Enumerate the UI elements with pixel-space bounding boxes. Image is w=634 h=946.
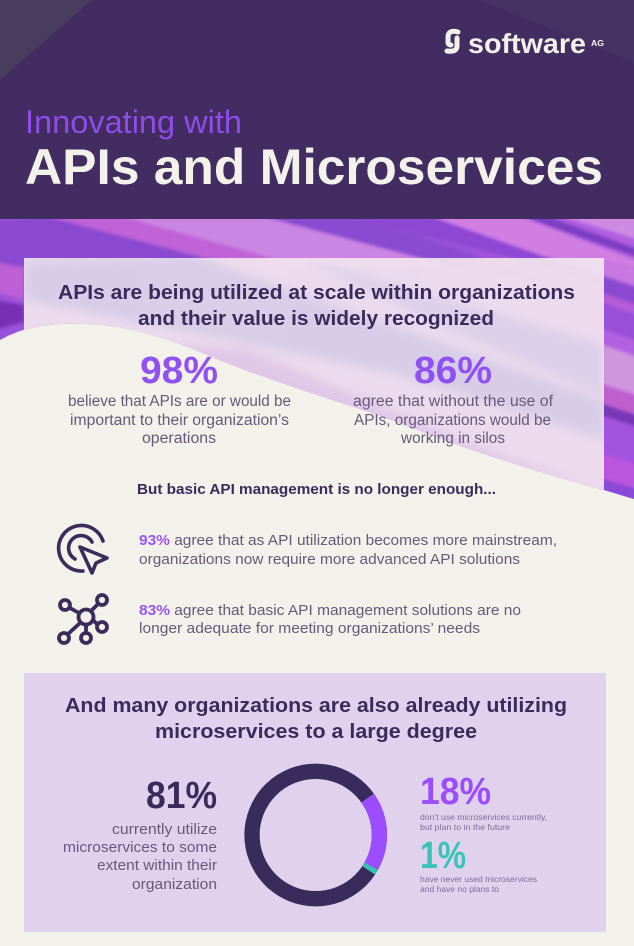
heading: APIs at scale: APIs are being utilized at scale within organizations [58,282,575,304]
stat: 18% [420,771,547,832]
stat text: 83% [139,602,521,637]
heading: microservices [65,695,567,743]
stat: 1%: have never used microservices [420,874,537,884]
stat: 1% [420,835,537,894]
stat: 86% [353,350,554,447]
stat text: 83%: longer adequate for meeting organizations’ needs [139,620,480,637]
stat: 1%: and have no plans to [420,884,499,894]
panel: translucent API panel background [24,258,604,498]
heading: microservices: microservices to a large degree [155,721,477,743]
icon: network nodes [59,595,107,643]
stat: 98%: 98% [140,350,218,392]
header band [0,0,634,219]
title: Innovating with [25,104,242,140]
subheading: basic API management: But basic API management is no longer enough... [137,482,496,498]
heading: APIs at scale: and their value is widely recognized [138,308,494,330]
title: APIs and Microservices [25,139,603,195]
stat: 98%: important to their organization’s [70,412,289,429]
stat text: 83%: 83% agree that basic API management solutions are no [139,602,521,619]
stat: 18%: don’t use microservices currently, [420,812,547,822]
stat: 81%: 81% [146,775,217,817]
stat: 81% [63,775,217,893]
logo: Software AG: software [468,28,586,59]
stat: 81%: microservices to some [63,840,217,856]
heading: microservices: And many organizations are also already utilizing [65,695,567,717]
stat: 98%: operations [142,430,216,447]
stat text: 93%: organizations now require more advanced API solutions [139,551,520,568]
stat text: 93% [139,532,557,568]
stat text: 93%: 93% agree that as API utilization becomes more mainstream, [139,532,557,549]
stat: 86%: 86% [414,350,492,392]
stat: 98% [68,350,291,447]
purple wave background [0,216,634,510]
stat: 1%: 1% [420,835,466,877]
donut chart [227,746,404,924]
stat: 81%: extent within their [97,858,217,874]
icon: target cursor [59,525,107,573]
stat: 18%: 18% [420,771,491,813]
panel: microservices [24,673,606,932]
stat: 86%: APIs, organizations would be [354,412,551,429]
stat: 86%: working in silos [400,430,505,447]
title [25,104,603,195]
logo: Software AG: AG [591,39,604,48]
stat: 86%: agree that without the use of [353,393,554,410]
stat: 18%: but plan to in the future [420,822,510,832]
stat: 98%: believe that APIs are or would be [68,393,291,410]
stat: 81%: currently utilize [112,822,217,838]
stat: 81%: organization [132,877,217,893]
heading: APIs at scale [58,282,575,330]
